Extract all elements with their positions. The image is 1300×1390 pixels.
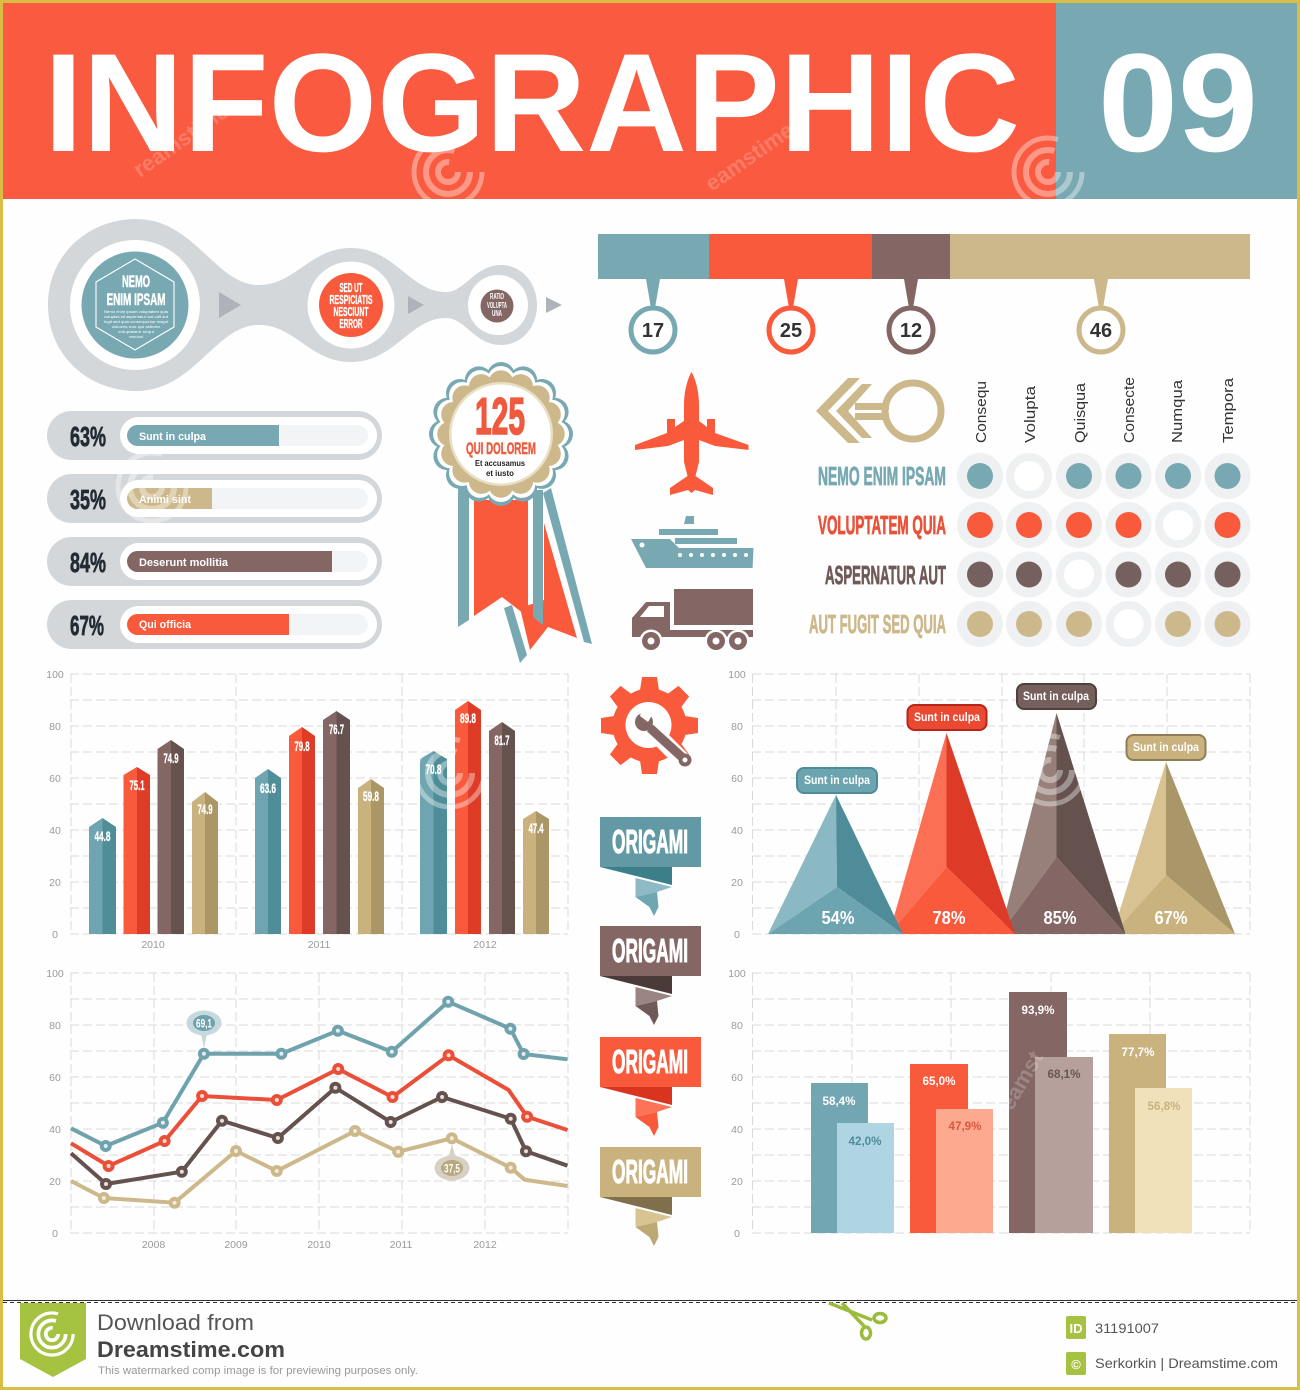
origami banner brown: ORIGAMI [612,932,688,969]
issue number: 09 [1098,24,1258,181]
watermark swirls [118,138,1084,807]
chart grid and axes [46,669,568,951]
matrix row 4: AUT FUGIT SED QUIA [809,609,946,639]
origami banner red [600,1037,701,1136]
chart grid and axes: 2011 [308,939,330,951]
marker 25 [769,279,813,352]
cut line [3,1300,1297,1302]
tan bar pair [1109,1034,1192,1233]
pyramid chart grid [728,669,1250,941]
brown bar pair: 68,1% [1048,1067,1081,1081]
overlapping bar chart grid: 0 [734,1228,740,1240]
watermark text: eamstime [701,117,798,196]
progress row 35%: 35% [70,484,106,515]
step one circle: voluptatem sequi [118,329,154,334]
marker 25: 25 [780,320,802,342]
callout 69,1: 69,1 [196,1016,212,1030]
2010 bars: 75.1 [130,777,145,793]
matrix column headers: Tempora [1220,377,1237,443]
overlapping bar chart grid: 40 [731,1124,743,1136]
step two circle: ERROR [340,316,363,331]
step one arrow [219,292,241,318]
matrix column headers: Consequ [973,381,990,443]
line chart grid: 60 [49,1072,61,1084]
2010 bars: 74.9 [164,750,179,766]
pyramid chart grid: 0 [734,929,740,941]
chart grid and axes: 0 [52,929,58,941]
progress row 63%: 63% [70,421,106,452]
overlapping bar chart grid: 80 [731,1020,743,1032]
step one circle: dolores eos qui ratione [112,324,161,329]
2012 bars: 89.8 [460,710,476,726]
2011 bars: 76.7 [329,721,344,737]
line chart grid: 2012 [473,1239,497,1251]
progress row 35% [47,474,382,523]
origami banner brown [600,926,701,1025]
origami banner teal: ORIGAMI [612,823,688,860]
pyramid teal 54%: 54% [822,908,854,928]
chart grid and axes: 40 [49,825,61,837]
step one circle: Nemo enim ipsam voluptatem quia [104,309,169,314]
step one circle: nesciunt [129,334,144,339]
overlapping bar chart [728,968,1250,1240]
progress bars [47,411,382,649]
credit badge: © [1071,1357,1081,1372]
step one circle [70,240,200,370]
rosette text: et iusto [486,468,514,478]
matrix row 2: VOLUPTATEM QUIA [818,510,946,540]
step one circle: ENIM IPSAM [106,290,166,309]
rosette scalloped seal [429,362,573,506]
teal bar pair: 58,4% [822,1094,856,1108]
pyramid tan 67% [1112,735,1235,934]
pyramid brown 85% [1000,684,1126,934]
progress row 84%: Deserunt mollitia [139,557,229,569]
teal bar pair [811,1083,894,1233]
download site: Dreamstime.com [97,1337,285,1362]
rosette badge [429,362,592,663]
red series [71,1051,568,1170]
origami banner tan [600,1147,701,1246]
chart grid and axes: 80 [49,721,61,733]
pyramid teal 54%: Sunt in culpa [804,773,870,787]
marker 46: 46 [1090,320,1112,342]
line chart grid: 0 [52,1228,58,1240]
chart grid and axes: 2012 [473,939,497,951]
progress row 67%: Qui officia [139,619,192,631]
title: INFOGRAPHIC [44,24,1020,181]
step two circle: NESCIUNT [334,304,369,319]
icon: ship [631,516,754,568]
icon: airplane [635,372,748,495]
pyramid red 78% [889,705,1015,934]
overlapping bar chart grid: 20 [731,1176,743,1188]
id number: 31191007 [1095,1320,1159,1336]
rosette text [466,388,536,478]
tan bar pair: 56,8% [1148,1099,1181,1113]
icon: tan arrow with ring [816,378,941,443]
progress row 67%: 67% [70,610,104,641]
chart grid and axes: 100 [46,669,64,681]
2010 bars: 44.8 [94,828,111,844]
step three circle: UNA [492,309,502,318]
icon: truck [632,589,753,652]
matrix row 3 [825,552,1250,598]
tan series [71,1127,568,1207]
pyramid chart grid: 80 [731,721,743,733]
id badge [1066,1316,1086,1339]
marker 46 [1079,279,1123,352]
line chart [46,968,568,1251]
2012 bars: 47.4 [528,820,544,836]
step two circle [308,262,394,348]
chain blob [48,219,537,391]
brown bar pair: 93,9% [1022,1003,1055,1017]
marker 12: 12 [900,320,922,342]
download note: This watermarked comp image is for previewing purposes only. [98,1365,418,1377]
stacked bar with pointers [598,234,1250,352]
pyramid chart grid: 40 [731,825,743,837]
2012 bars [420,701,549,934]
process chain [48,219,562,391]
pyramid chart grid: 20 [731,877,743,889]
teal bar pair: 42,0% [848,1134,882,1148]
header red panel [3,3,1056,199]
2011 bars: 63.6 [260,780,276,796]
matrix column headers: Quisqua [1072,382,1089,443]
pyramid red 78%: Sunt in culpa [914,710,980,724]
marker 17 [631,279,675,352]
pyramid tan 67%: Sunt in culpa [1133,740,1199,754]
2011 bars: 79.8 [294,738,310,754]
marker 17: 17 [642,320,664,342]
pyramid red 78%: 78% [932,908,966,928]
callout 69,1 [186,1010,222,1048]
overlapping bar chart grid [728,968,1250,1240]
origami banner tan: ORIGAMI [612,1153,688,1190]
stacked bar segments [598,234,1250,279]
header banner [3,3,1297,199]
chart grid and axes: 20 [49,877,61,889]
rosette ribbons [458,487,592,663]
brown series [71,1084,568,1188]
step two arrow [408,296,424,314]
origami banner teal [600,817,701,916]
id badge: ID [1070,1321,1082,1336]
matrix row 3: ASPERNATUR AUT [825,560,946,590]
matrix row 2 [818,502,1250,548]
line chart grid: 40 [49,1124,61,1136]
line chart grid [46,968,568,1251]
matrix column headers: Consecte [1121,377,1138,443]
red bar pair: 47,9% [948,1119,982,1133]
line chart grid: 2011 [390,1239,412,1251]
line chart grid: 80 [49,1020,61,1032]
footer logo ribbon [20,1303,86,1377]
step one circle: NEMO [122,272,150,291]
pyramid teal 54% [768,768,903,934]
2010 bars [89,740,218,934]
scissors [829,1303,886,1339]
download heading: Download from [97,1310,254,1335]
chart grid and axes: 60 [49,773,61,785]
line chart grid: 2008 [142,1239,165,1251]
origami banner red: ORIGAMI [612,1043,688,1080]
red bar pair [910,1064,993,1233]
pyramid chart grid: 100 [728,669,746,681]
matrix row 1 [818,453,1250,499]
step one circle: fugit sed quia consequuntur magni [104,319,168,324]
line chart grid: 2009 [224,1239,248,1251]
progress row 84%: 84% [70,547,106,578]
progress row 84% [47,537,382,586]
pyramid tan 67%: 67% [1154,908,1188,928]
chart grid and axes: 2010 [141,939,165,951]
progress row 67% [47,600,382,649]
step two circle: SED UT [340,280,363,295]
watermark text [129,98,1048,1114]
matrix column headers: Volupta [1022,385,1039,443]
step one circle: voluptas sit aspernatur aut odit aut [104,314,169,319]
2011 bars [255,711,384,934]
line chart grid: 20 [49,1176,61,1188]
red bar pair: 65,0% [922,1074,956,1088]
pyramid chart grid: 60 [731,773,743,785]
progress row 63%: Sunt in culpa [139,431,207,443]
callout 37,5 [434,1144,470,1180]
credit badge [1066,1352,1086,1375]
matrix column headers [973,377,1237,443]
2012 bars: 81.7 [494,732,510,748]
line chart grid: 100 [46,968,64,980]
watermark text: reamstime [129,98,233,182]
header teal panel [1056,3,1297,199]
teal series [71,998,568,1150]
rosette text: Et accusamus [475,458,525,468]
overlapping bar chart grid: 60 [731,1072,743,1084]
progress row 35%: Animi sint [139,494,191,506]
2010 bars: 74.9 [198,801,213,817]
progress row 63% [47,411,382,460]
step three arrow [546,297,562,313]
step three circle: RATIO [490,292,504,301]
rosette text: 125 [475,388,525,446]
pyramid brown 85%: Sunt in culpa [1023,689,1089,703]
pyramid brown 85%: 85% [1044,908,1076,928]
2012 bars: 70.8 [426,761,442,777]
step two circle: RESPICIATIS [330,292,373,307]
pyramid chart [728,669,1250,941]
step three circle: VOLUPTA [487,301,507,310]
marker 12 [889,279,933,352]
watermark overlay [118,98,1084,1114]
bar chart: arrow bars 2010-2012 [46,669,568,951]
footer strip [3,1300,1297,1377]
icon: gear and wrench [601,677,698,774]
brown bar pair [1009,992,1093,1233]
rosette text: QUI DOLOREM [466,439,536,458]
callout 37,5: 37,5 [444,1162,460,1176]
matrix row 4 [809,601,1250,647]
matrix row 1: NEMO ENIM IPSAM [818,461,946,491]
overlapping bar chart grid: 100 [728,968,746,980]
2011 bars: 59.8 [363,788,379,804]
line chart grid: 2010 [307,1239,331,1251]
step three circle [468,275,528,335]
matrix column headers: Numqua [1169,379,1186,443]
tan bar pair: 77,7% [1122,1045,1155,1059]
watermark text: eamst [995,1046,1048,1114]
credit text: Serkorkin | Dreamstime.com [1095,1355,1278,1371]
